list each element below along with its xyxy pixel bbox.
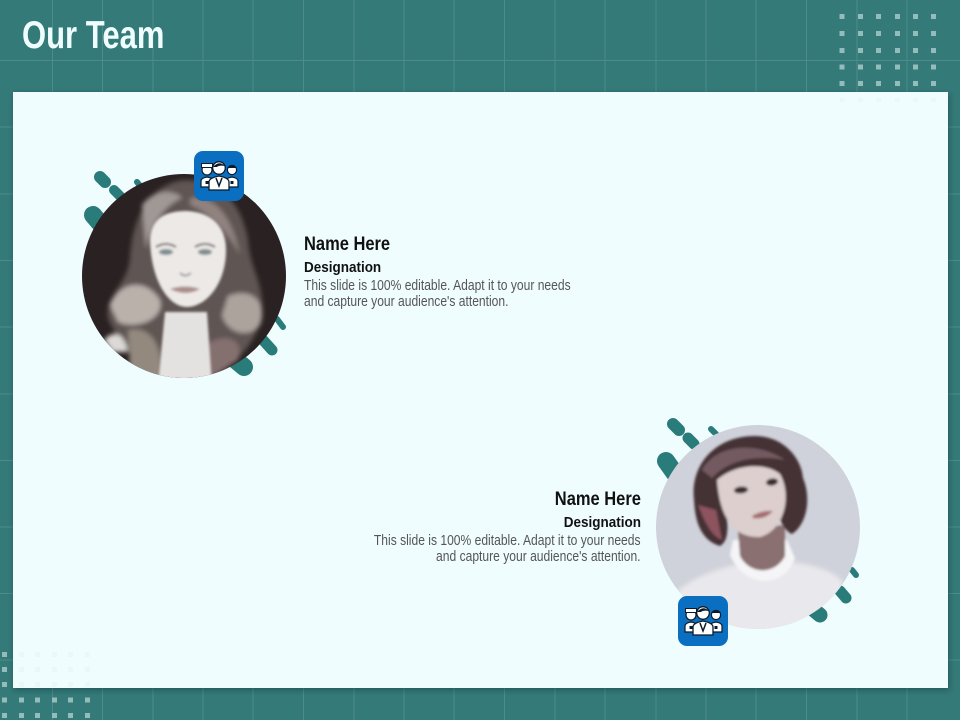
- text block: member 1: [304, 233, 571, 310]
- member 2 description: and capture your audience's attention.: [437, 549, 641, 565]
- member 2 description: [374, 533, 641, 565]
- faint dots over panel: [19, 98, 936, 687]
- decorative pills 1: [93, 177, 283, 367]
- member 1 description: [304, 278, 571, 310]
- team member 1 portrait group: [80, 151, 290, 385]
- member 1 description: This slide is 100% editable. Adapt it to your needs: [304, 278, 571, 294]
- text block: member 2: [374, 488, 641, 565]
- title: Our Team: [22, 14, 164, 57]
- member 1 designation: Designation: [304, 260, 381, 276]
- photo: woman with long wavy hair: [80, 172, 290, 385]
- dot pattern: bottom left: [2, 652, 90, 718]
- photo: woman with short hair: [654, 423, 864, 640]
- member 2 designation: Designation: [564, 515, 641, 531]
- member 1 description: and capture your audience's attention.: [304, 294, 508, 310]
- member 2 name: Name Here: [555, 488, 641, 510]
- icon: team badge 1: [194, 151, 244, 201]
- team member 2 portrait group: [654, 423, 864, 646]
- member 2 description: This slide is 100% editable. Adapt it to your needs: [374, 533, 641, 549]
- icon: team badge 2: [678, 596, 728, 646]
- member 1 name: Name Here: [304, 233, 390, 255]
- dot pattern: top right: [840, 14, 936, 86]
- decorative pills 2: [666, 424, 856, 615]
